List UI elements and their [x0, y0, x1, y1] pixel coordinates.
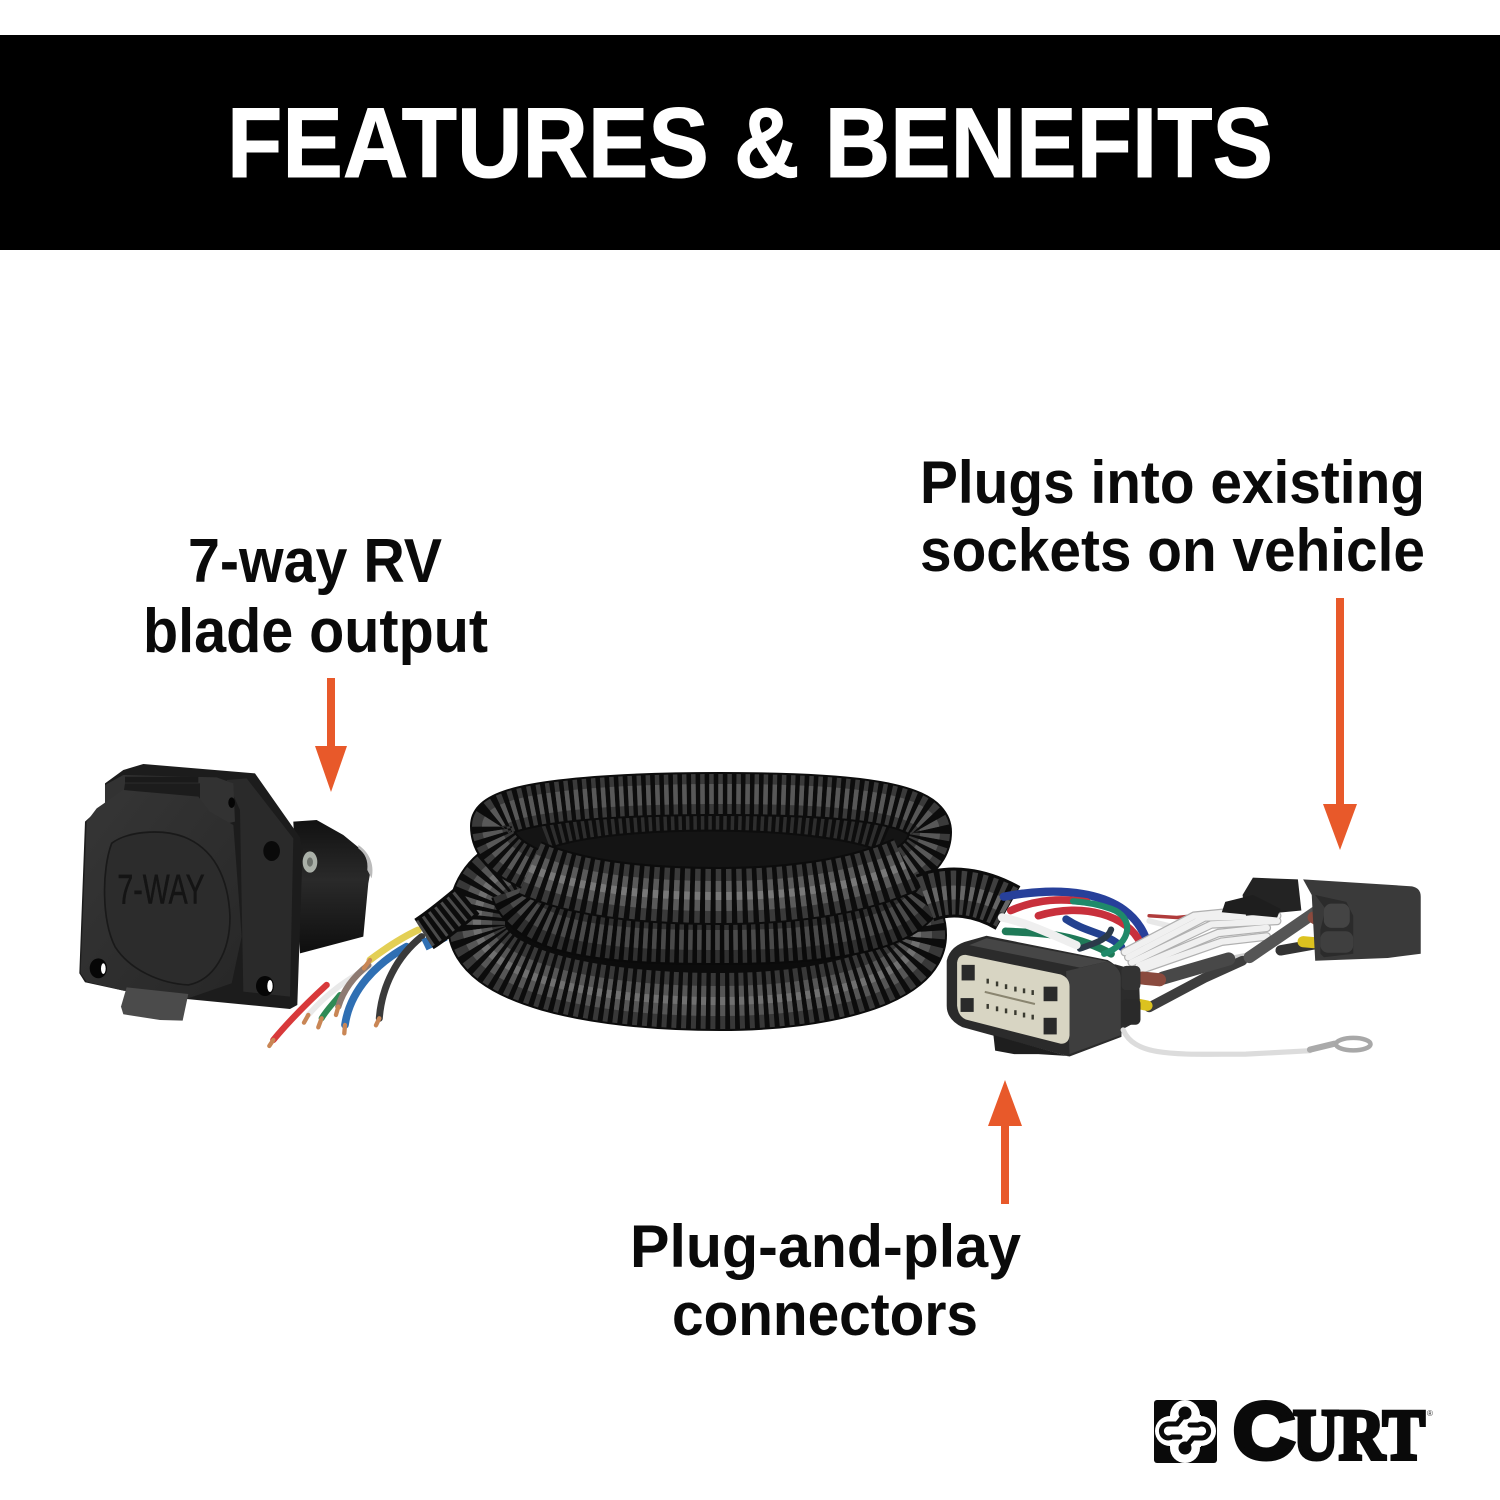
middle coil	[515, 890, 920, 940]
mounting plate	[79, 764, 303, 1009]
arrow: to plug-and-play connector	[988, 1080, 1022, 1204]
hinge cap	[105, 775, 235, 825]
logo wordmark	[1233, 1386, 1425, 1475]
left loom end	[424, 900, 468, 945]
rear inner strand	[545, 817, 885, 838]
cream pin face	[957, 955, 1070, 1044]
callout: plugs into existing sockets	[920, 449, 1425, 584]
right loom tail	[925, 893, 1008, 908]
socket rear cylinder	[293, 820, 373, 953]
callout: 7-way RV blade output: 7-way RV	[188, 527, 442, 596]
callout: 7-way RV blade output	[143, 527, 488, 666]
product: vehicle connectors and wiring	[947, 878, 1421, 1057]
arrow: to 7-way socket	[315, 678, 347, 792]
vehicle-side connector	[1222, 878, 1421, 961]
plug rear ports	[1121, 966, 1140, 1025]
bottom coil	[477, 862, 917, 1001]
callout: plugs into existing sockets: Plugs into existing	[920, 449, 1425, 516]
brand logo: CURT	[1154, 1386, 1433, 1475]
heat-shrink leads	[1139, 912, 1329, 1007]
logo wordmark: URT	[1293, 1395, 1425, 1475]
ground wire with ring terminal	[1123, 1030, 1371, 1054]
callout: plug-and-play connectors: Plug-and-play	[630, 1213, 1022, 1280]
coil shadow fill	[478, 883, 922, 1007]
pin slots	[986, 979, 1034, 1020]
bottom tab	[993, 1035, 1070, 1057]
top coil loop	[492, 794, 930, 896]
socket lid	[81, 790, 242, 998]
callout: 7-way RV blade output: blade output	[143, 597, 488, 666]
callout: plugs into existing sockets: sockets on vehicle	[920, 517, 1425, 584]
callout: plug-and-play connectors	[630, 1213, 1022, 1348]
inner dark fill	[507, 794, 917, 890]
white wire bundle	[1125, 911, 1277, 969]
mounting holes	[90, 797, 280, 996]
logo wordmark: C	[1233, 1386, 1295, 1475]
header banner	[0, 35, 1500, 250]
embossed 7-WAY lettering: 7-WAY	[117, 865, 205, 912]
lid raised disc	[105, 832, 230, 985]
main plug shell	[947, 936, 1140, 1057]
callout: plug-and-play connectors: connectors	[672, 1281, 978, 1348]
product: corrugated wire loom coil	[477, 794, 1008, 1007]
product: 7-way socket with bare wires	[79, 764, 422, 1046]
registered mark: ®	[1427, 1409, 1433, 1418]
wire bundle	[269, 930, 422, 1046]
corner latches	[961, 965, 1057, 1034]
logo emblem	[1154, 1400, 1217, 1463]
top coil front	[530, 865, 905, 896]
pull tab	[121, 987, 188, 1021]
colored wires	[1002, 892, 1229, 954]
arrow: to vehicle plug	[1323, 598, 1357, 850]
title: FEATURES & BENEFITS	[227, 87, 1273, 198]
